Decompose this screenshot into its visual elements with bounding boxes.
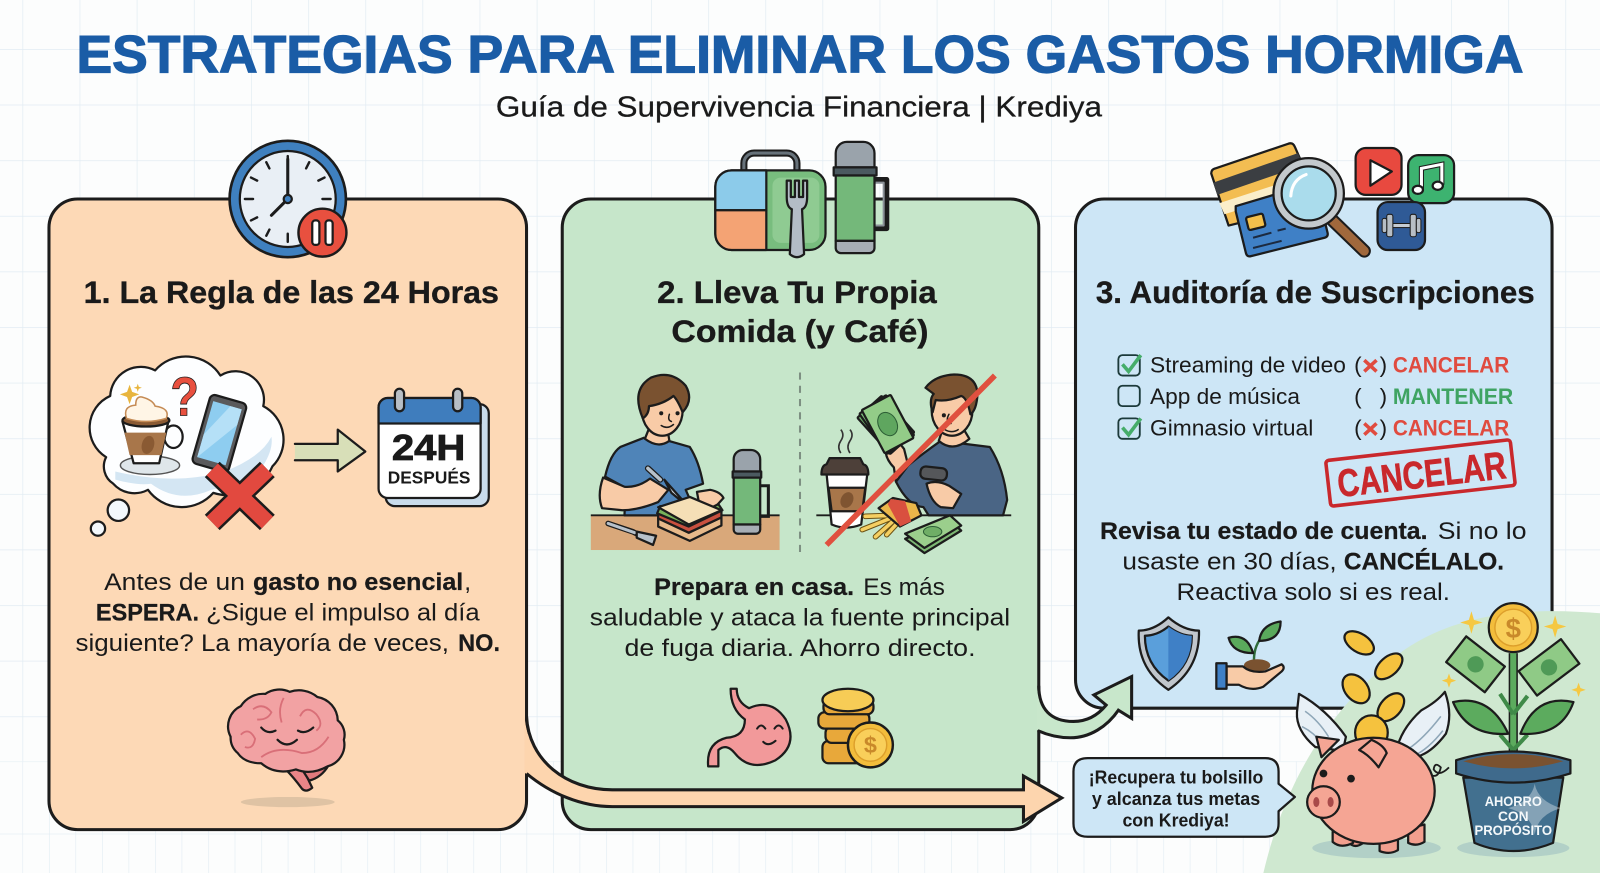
- text: panel 3 body: Si no lo: [1438, 518, 1527, 545]
- icon: thought cloud with coffee and phone: ?: [170, 365, 199, 427]
- subtitle: Guía de Supervivencia Financiera | Krediya: [496, 91, 1102, 123]
- bills: [1446, 636, 1505, 692]
- text: panel 1 body: Antes de un: [104, 569, 245, 596]
- red slash: [827, 376, 995, 545]
- icon: credit cards and magnifier: [1211, 143, 1364, 256]
- checklist: (: [1354, 416, 1362, 441]
- text: panel 1 body: siguiente? La mayoría de veces,: [76, 630, 449, 657]
- pot: [1463, 778, 1563, 851]
- illustration: man spending on coffee and snacks: [816, 375, 1011, 553]
- checklist: (: [1354, 352, 1362, 377]
- text: panel 2 body: Prepara en casa.: [654, 574, 854, 601]
- icon: calendar 24h: 24H: [392, 428, 465, 468]
- heading 2: [657, 274, 937, 349]
- icon: calendar 24h: [379, 389, 489, 506]
- text: panel 2 body: de fuga diaria. Ahorro directo.: [624, 635, 976, 662]
- illustration: money plant in pot: [1442, 603, 1586, 857]
- panel 2: lleva tu propia comida: [562, 142, 1039, 830]
- illustration: man preparing sandwich: [591, 375, 780, 550]
- text: panel 2 body: Es más: [863, 574, 945, 601]
- heading 2: Comida (y Café): [671, 313, 929, 349]
- arrow: green from panel 2: [1037, 677, 1132, 738]
- checklist: CANCELAR: [1393, 416, 1509, 441]
- coin on plant: [1489, 603, 1538, 652]
- arrow: orange from panel 1: [524, 714, 1062, 821]
- heading 1: 1. La Regla de las 24 Horas: [84, 274, 499, 310]
- panel 1: la regla de las 24 horas: [49, 141, 527, 830]
- checklist: Streaming de video: [1150, 352, 1346, 377]
- icon: gym app: [1378, 202, 1425, 250]
- text: panel 3 body: Reactiva solo si es real.: [1177, 579, 1450, 606]
- checklist: App de música: [1150, 384, 1301, 409]
- stamp: cancelar: CANCELAR: [1335, 444, 1508, 506]
- icon: calendar 24h: DESPUÉS: [388, 468, 470, 488]
- icon: thought cloud with coffee and phone: [90, 356, 284, 536]
- checklist: [1118, 352, 1513, 441]
- falling coins: [1337, 626, 1409, 750]
- icon: clock with pause: [230, 141, 346, 257]
- fries carton: [862, 498, 921, 537]
- icon: coin stack: $: [864, 732, 877, 758]
- speech bubble: recupera tu bolsillo: con Krediya!: [1122, 810, 1230, 831]
- text: panel 1 body: ,: [464, 569, 471, 596]
- text: panel 3 body: usaste en 30 días,: [1122, 548, 1337, 575]
- text: panel 3 body: Revisa tu estado de cuenta.: [1100, 518, 1428, 545]
- icon: hand with sprout: [1216, 621, 1284, 689]
- checklist: ): [1380, 416, 1387, 441]
- icon: green thermos: [834, 142, 887, 253]
- speech bubble: recupera tu bolsillo: ¡Recupera tu bolsillo: [1089, 767, 1263, 788]
- panel 3: auditoria de suscripciones: [1076, 143, 1552, 708]
- heading 3: 3. Auditoría de Suscripciones: [1096, 274, 1535, 310]
- background hill: [1263, 611, 1600, 873]
- icon: happy stomach: [708, 689, 791, 766]
- arrow: wait to next day: [295, 430, 365, 471]
- checklist: (: [1354, 384, 1362, 409]
- speech bubble: recupera tu bolsillo: [1073, 758, 1295, 837]
- illustration: money plant in pot: AHORRO: [1485, 794, 1542, 809]
- text: panel 1 body: NO.: [458, 630, 500, 657]
- speech bubble: recupera tu bolsillo: y alcanza tus metas: [1092, 788, 1260, 809]
- icon: music app: [1408, 155, 1454, 203]
- icon: lunchbox with fork: [715, 153, 826, 257]
- heading 2: 2. Lleva Tu Propia: [657, 274, 937, 310]
- icon: calm brain: [228, 689, 345, 807]
- text: panel 1 body: ¿Sigue el impulso al día: [206, 599, 480, 626]
- text: panel 1 body: [76, 569, 500, 657]
- icon: shield: [1139, 617, 1199, 690]
- checklist: CANCELAR: [1393, 352, 1509, 377]
- text: panel 1 body: gasto no esencial: [253, 569, 463, 596]
- text: panel 1 body: ESPERA.: [96, 599, 199, 626]
- illustration: money plant in pot: CON: [1498, 809, 1529, 824]
- text: panel 2 body: saludable y ataca la fuente principal: [590, 605, 1010, 632]
- illustration: flying piggy bank with coins: [1297, 626, 1449, 858]
- checklist: Gimnasio virtual: [1150, 416, 1313, 441]
- checklist: ): [1380, 352, 1387, 377]
- icon: video app: [1356, 148, 1402, 195]
- icon: coin stack: [818, 689, 893, 767]
- divider: [799, 372, 801, 552]
- illustration: money plant in pot: PROPÓSITO: [1474, 821, 1552, 838]
- coin on plant: $: [1506, 613, 1521, 644]
- checklist: ): [1380, 384, 1387, 409]
- text: panel 2 body: [590, 574, 1010, 662]
- checklist: MANTENER: [1393, 384, 1513, 409]
- text: panel 3 body: CANCÉLALO.: [1344, 547, 1504, 575]
- text: panel 3 body: [1100, 518, 1527, 606]
- title: ESTRATEGIAS PARA ELIMINAR LOS GASTOS HORMIGA: [77, 25, 1523, 84]
